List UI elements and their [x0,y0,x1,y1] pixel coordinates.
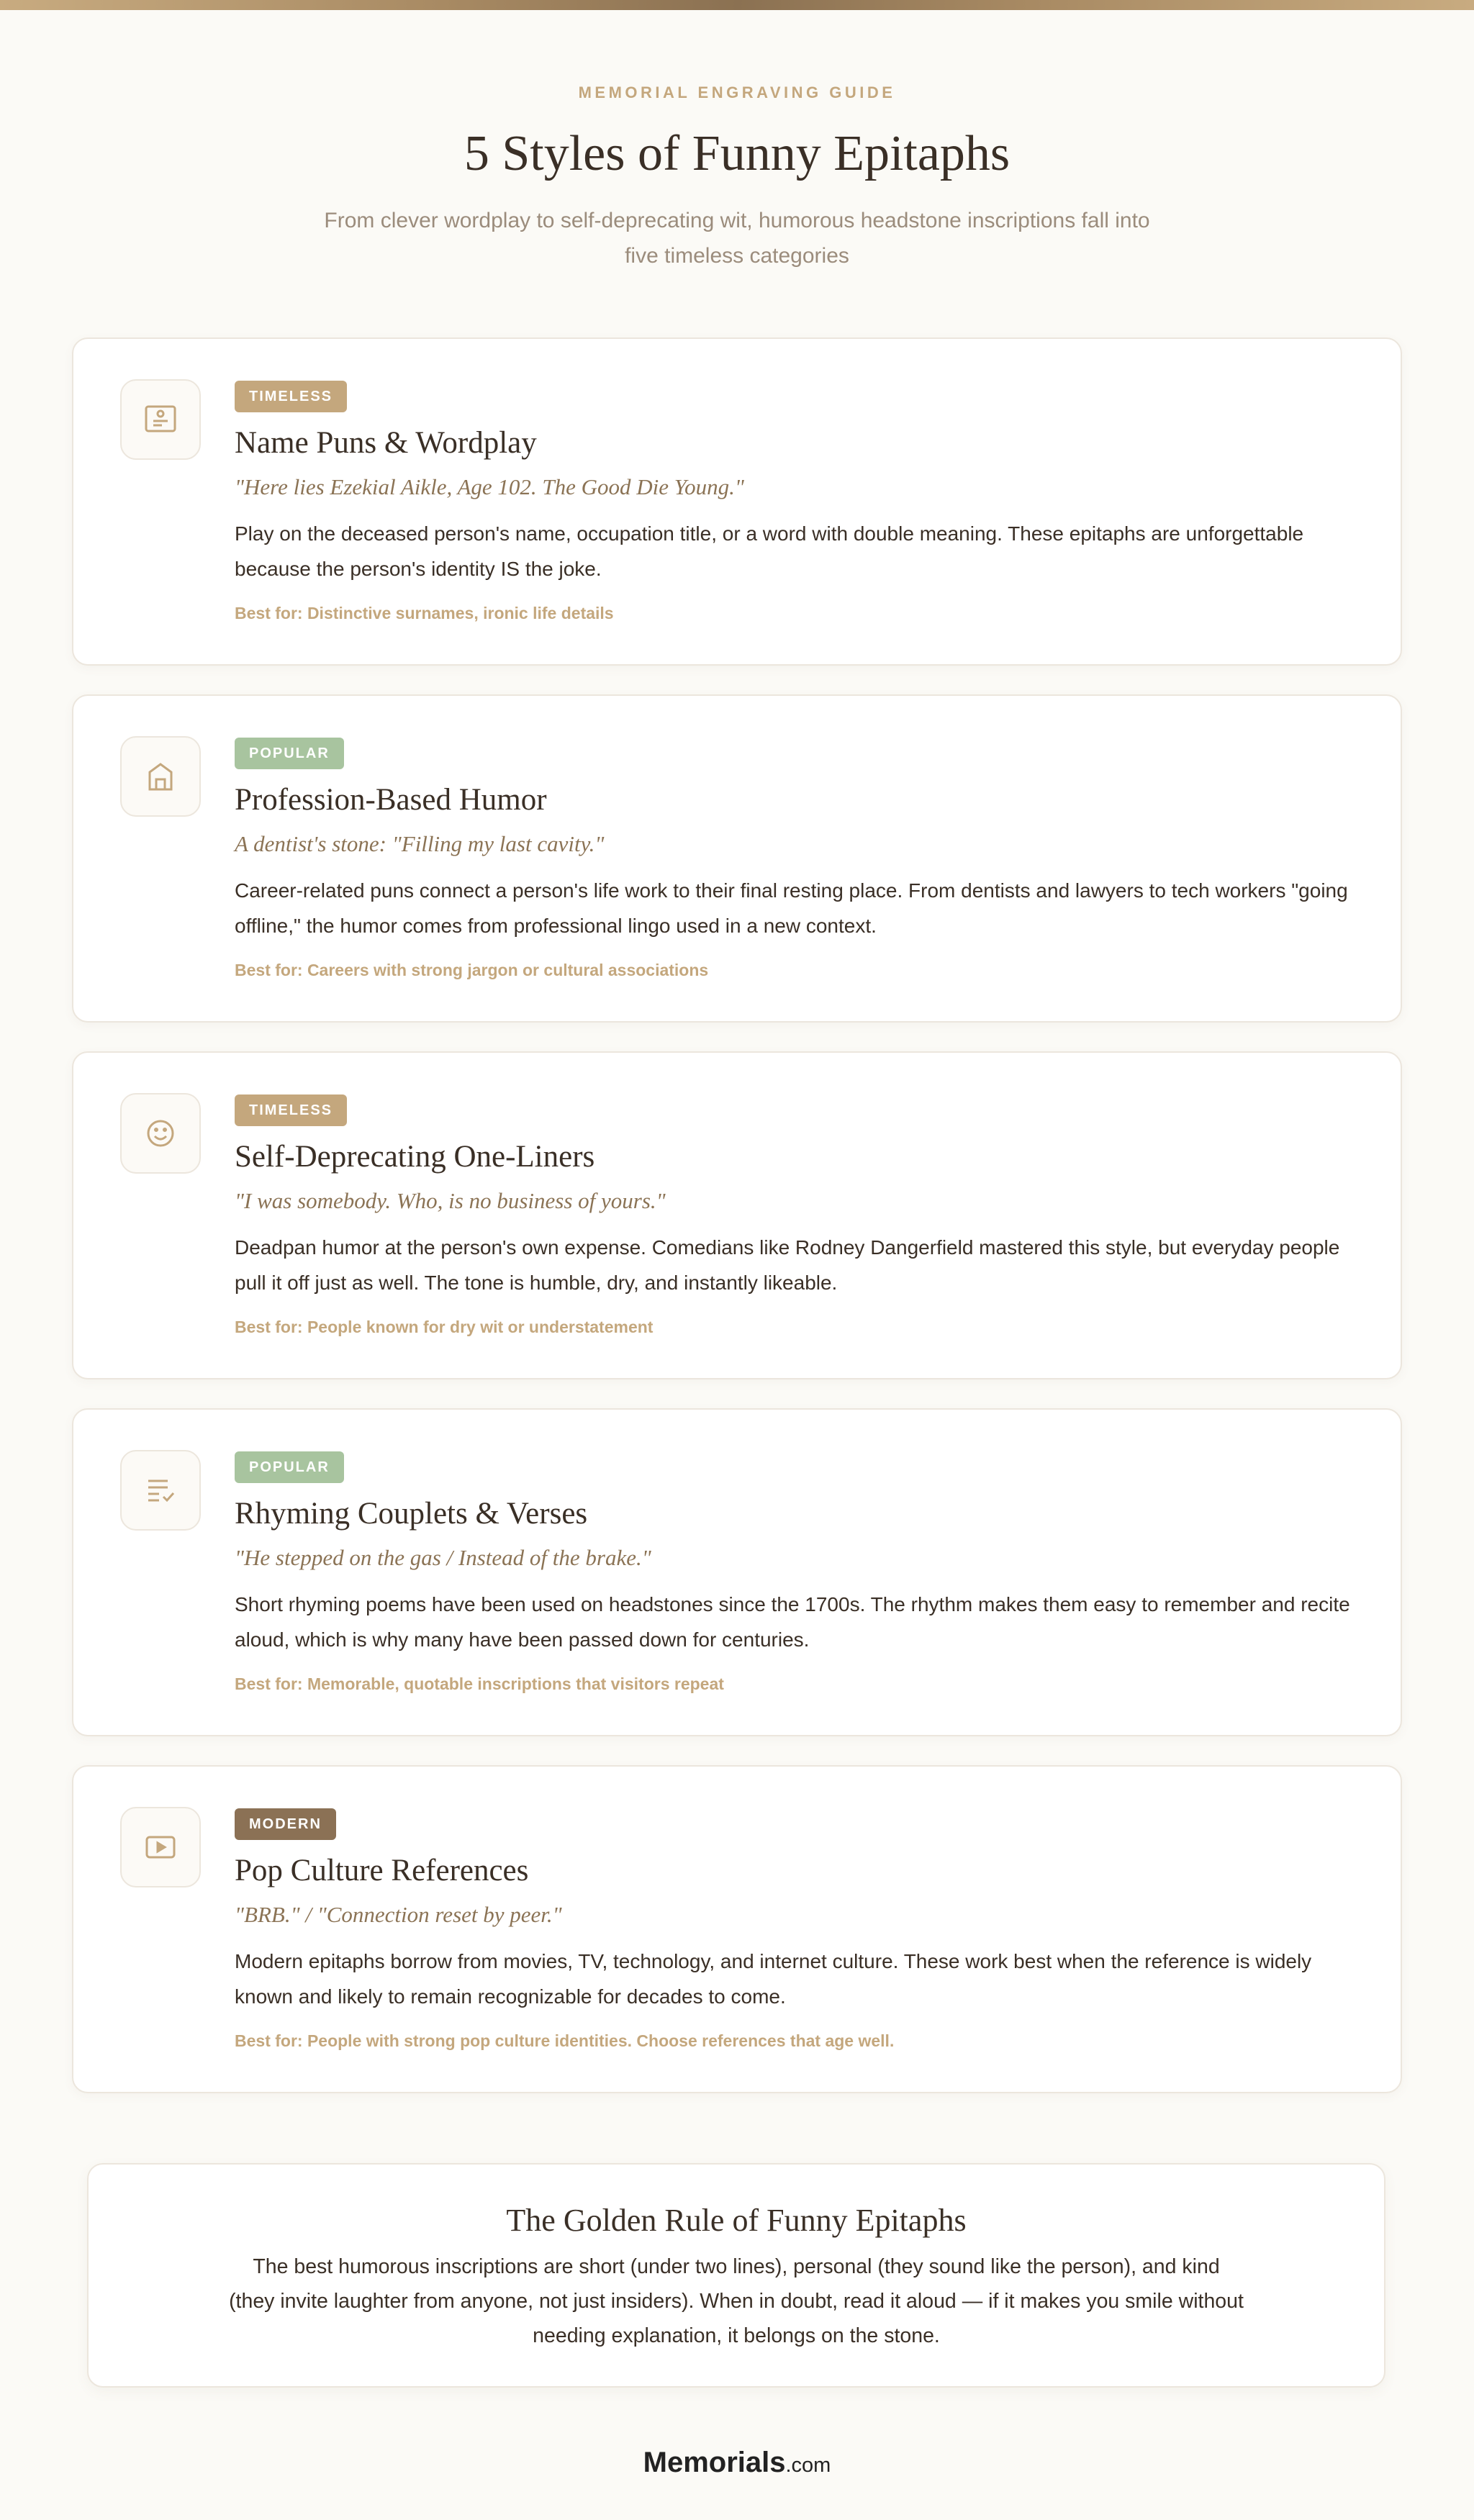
text: needing explanation, it belongs on the stone. [533,2324,940,2347]
description: Modern epitaphs borrow from movies, TV, technology, and internet culture. These work best when the reference is widely [235,1950,1311,1972]
description: Career-related puns connect a person's life work to their final resting place. From dentists and lawyers to tech workers "going [235,879,1348,902]
kicker: MEMORIAL ENGRAVING GUIDE [579,83,895,101]
heading: Pop Culture References [235,1854,528,1887]
panel: name puns [72,337,1402,666]
badge: TIMELESS [249,389,333,404]
panel: golden rule [87,2163,1385,2388]
logo: Memorials.com [643,2447,831,2478]
badge: TIMELESS [249,1102,333,1118]
description: Play on the deceased person's name, occupation title, or a word with double meaning. These epitaphs are unforgettable [235,522,1303,545]
panel: pop culture [72,1765,1402,2093]
badge: MODERN [249,1816,322,1832]
best for: Best for: Distinctive surnames, ironic life details [235,604,614,622]
icon: name tag [120,379,201,460]
description: Short rhyming poems have been used on headstones since the 1700s. The rhythm makes them easy to remember and recite [235,1593,1350,1615]
description [235,1236,1339,1294]
panel: rhyming [72,1408,1402,1736]
icon: building [120,736,201,817]
badge [235,738,344,769]
text: (they invite laughter from anyone, not just insiders). When in doubt, read it aloud — if it makes you smile without [229,2290,1244,2313]
heading: Self-Deprecating One-Liners [235,1140,594,1174]
heading: The Golden Rule of Funny Epitaphs [506,2203,967,2238]
subtitle: From clever wordplay to self-deprecating wit, humorous headstone inscriptions fall into [324,209,1150,232]
quote: "I was somebody. Who, is no business of yours." [235,1188,666,1213]
quote: "Here lies Ezekial Aikle, Age 102. The Good Die Young." [235,474,744,499]
description [235,522,1303,580]
description: because the person's identity IS the joke. [235,558,602,580]
description: aloud, which is why many have been passed down for centuries. [235,1628,809,1651]
quote: "BRB." / "Connection reset by peer." [235,1902,562,1927]
subtitle [324,209,1150,268]
quote: "He stepped on the gas / Instead of the brake." [235,1545,651,1570]
icon: play [120,1807,201,1887]
panel: self-deprecating [72,1051,1402,1379]
badge [235,1451,344,1483]
best for: Best for: People known for dry wit or understatement [235,1318,653,1336]
description: offline," the humor comes from professional lingo used in a new context. [235,915,877,937]
panel: profession [72,694,1402,1023]
badge [235,381,347,412]
heading: Rhyming Couplets & Verses [235,1497,587,1531]
badge [235,1808,336,1840]
badge [235,1094,347,1126]
description: known and likely to remain recognizable for decades to come. [235,1985,786,2008]
badge: POPULAR [249,1459,330,1475]
best for: Best for: Careers with strong jargon or cultural associations [235,961,708,979]
best for: Best for: Memorable, quotable inscriptions that visitors repeat [235,1674,724,1693]
heading: Name Puns & Wordplay [235,426,537,460]
heading: Profession-Based Humor [235,783,547,817]
quote: A dentist's stone: "Filling my last cavity." [235,831,604,856]
description: Deadpan humor at the person's own expense. Comedians like Rodney Dangerfield mastered this style, but everyday people [235,1236,1339,1259]
description [235,1950,1311,2008]
description: pull it off just as well. The tone is humble, dry, and instantly likeable. [235,1272,837,1294]
description [235,879,1348,937]
text [229,2255,1244,2347]
description [235,1593,1350,1651]
title: 5 Styles of Funny Epitaphs [464,126,1010,181]
subtitle: five timeless categories [625,244,849,268]
best for: Best for: People with strong pop culture identities. Choose references that age well. [235,2031,894,2050]
icon: smiley [120,1093,201,1174]
text: The best humorous inscriptions are short (under two lines), personal (they sound like the person), and kind [253,2255,1220,2278]
badge: POPULAR [249,745,330,761]
icon: list [120,1450,201,1531]
